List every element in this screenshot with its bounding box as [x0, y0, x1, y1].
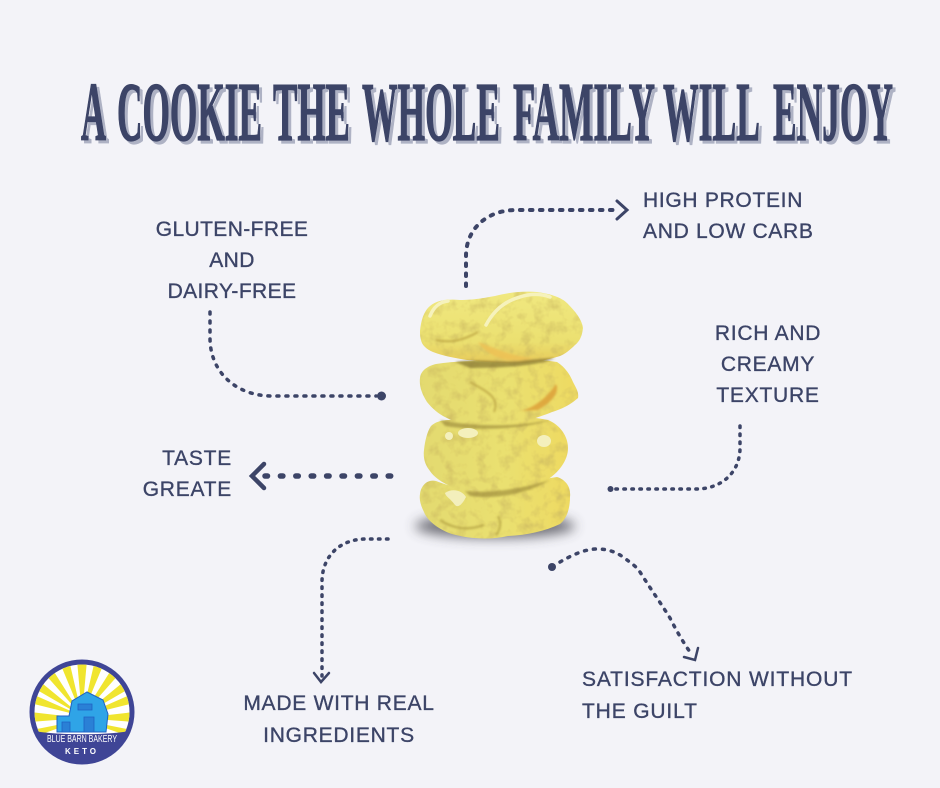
icon: barn	[57, 692, 108, 732]
arrow: to taste great	[252, 464, 391, 488]
title: WHOLE	[362, 66, 500, 159]
arrow: to made with real ingredients	[314, 539, 388, 682]
logo: KETO	[65, 747, 99, 756]
text: high protein and low carb	[642, 189, 814, 243]
title: FAMILY	[513, 66, 655, 159]
text: made with real ingredients: MADE WITH REAL	[243, 692, 435, 715]
text: high protein and low carb: HIGH PROTEIN	[643, 189, 803, 212]
text: gluten-free and dairy-free: AND	[209, 249, 255, 272]
logo	[30, 660, 134, 764]
text: high protein and low carb: AND LOW CARB	[643, 220, 814, 243]
title: WILL	[663, 66, 760, 159]
icon: sun rays	[34, 664, 130, 732]
title: COOKIE	[117, 66, 262, 159]
title: THE	[273, 66, 350, 159]
text: satisfaction without the guilt: THE GUILT	[582, 700, 698, 723]
arrow: from rich and creamy	[608, 426, 740, 492]
cookie details	[436, 332, 557, 535]
text: gluten-free and dairy-free: DAIRY-FREE	[168, 280, 296, 303]
title	[81, 66, 896, 162]
arrow: to satisfaction without the guilt	[548, 549, 698, 660]
text: gluten-free and dairy-free	[156, 218, 308, 303]
logo text: BLUE BARN BAKERY	[47, 734, 117, 745]
title: WHOLE	[365, 69, 503, 162]
title: A	[84, 69, 109, 162]
text: taste greate: TASTE	[162, 447, 232, 470]
text: rich and creamy texture	[715, 322, 821, 407]
text: rich and creamy texture: TEXTURE	[716, 384, 820, 407]
title: THE	[276, 69, 353, 162]
text: made with real ingredients	[243, 692, 435, 747]
title: WILL	[666, 69, 763, 162]
text: gluten-free and dairy-free: GLUTEN-FREE	[156, 218, 308, 241]
text: taste greate	[143, 447, 232, 501]
text: taste greate: GREATE	[143, 478, 232, 501]
text: made with real ingredients: INGREDIENTS	[263, 724, 415, 747]
arrow: from gluten-free	[210, 312, 386, 400]
text: satisfaction without the guilt: SATISFACTION WITHOUT	[582, 668, 853, 691]
title: FAMILY	[516, 69, 658, 162]
text: rich and creamy texture: CREAMY	[721, 353, 815, 376]
text: rich and creamy texture: RICH AND	[715, 322, 821, 345]
logo lower band	[38, 732, 126, 760]
title: A	[81, 66, 106, 159]
title: COOKIE	[120, 69, 265, 162]
arrow: to high protein	[466, 201, 627, 286]
cookie stack	[415, 292, 583, 538]
text: satisfaction without the guilt	[582, 668, 853, 723]
